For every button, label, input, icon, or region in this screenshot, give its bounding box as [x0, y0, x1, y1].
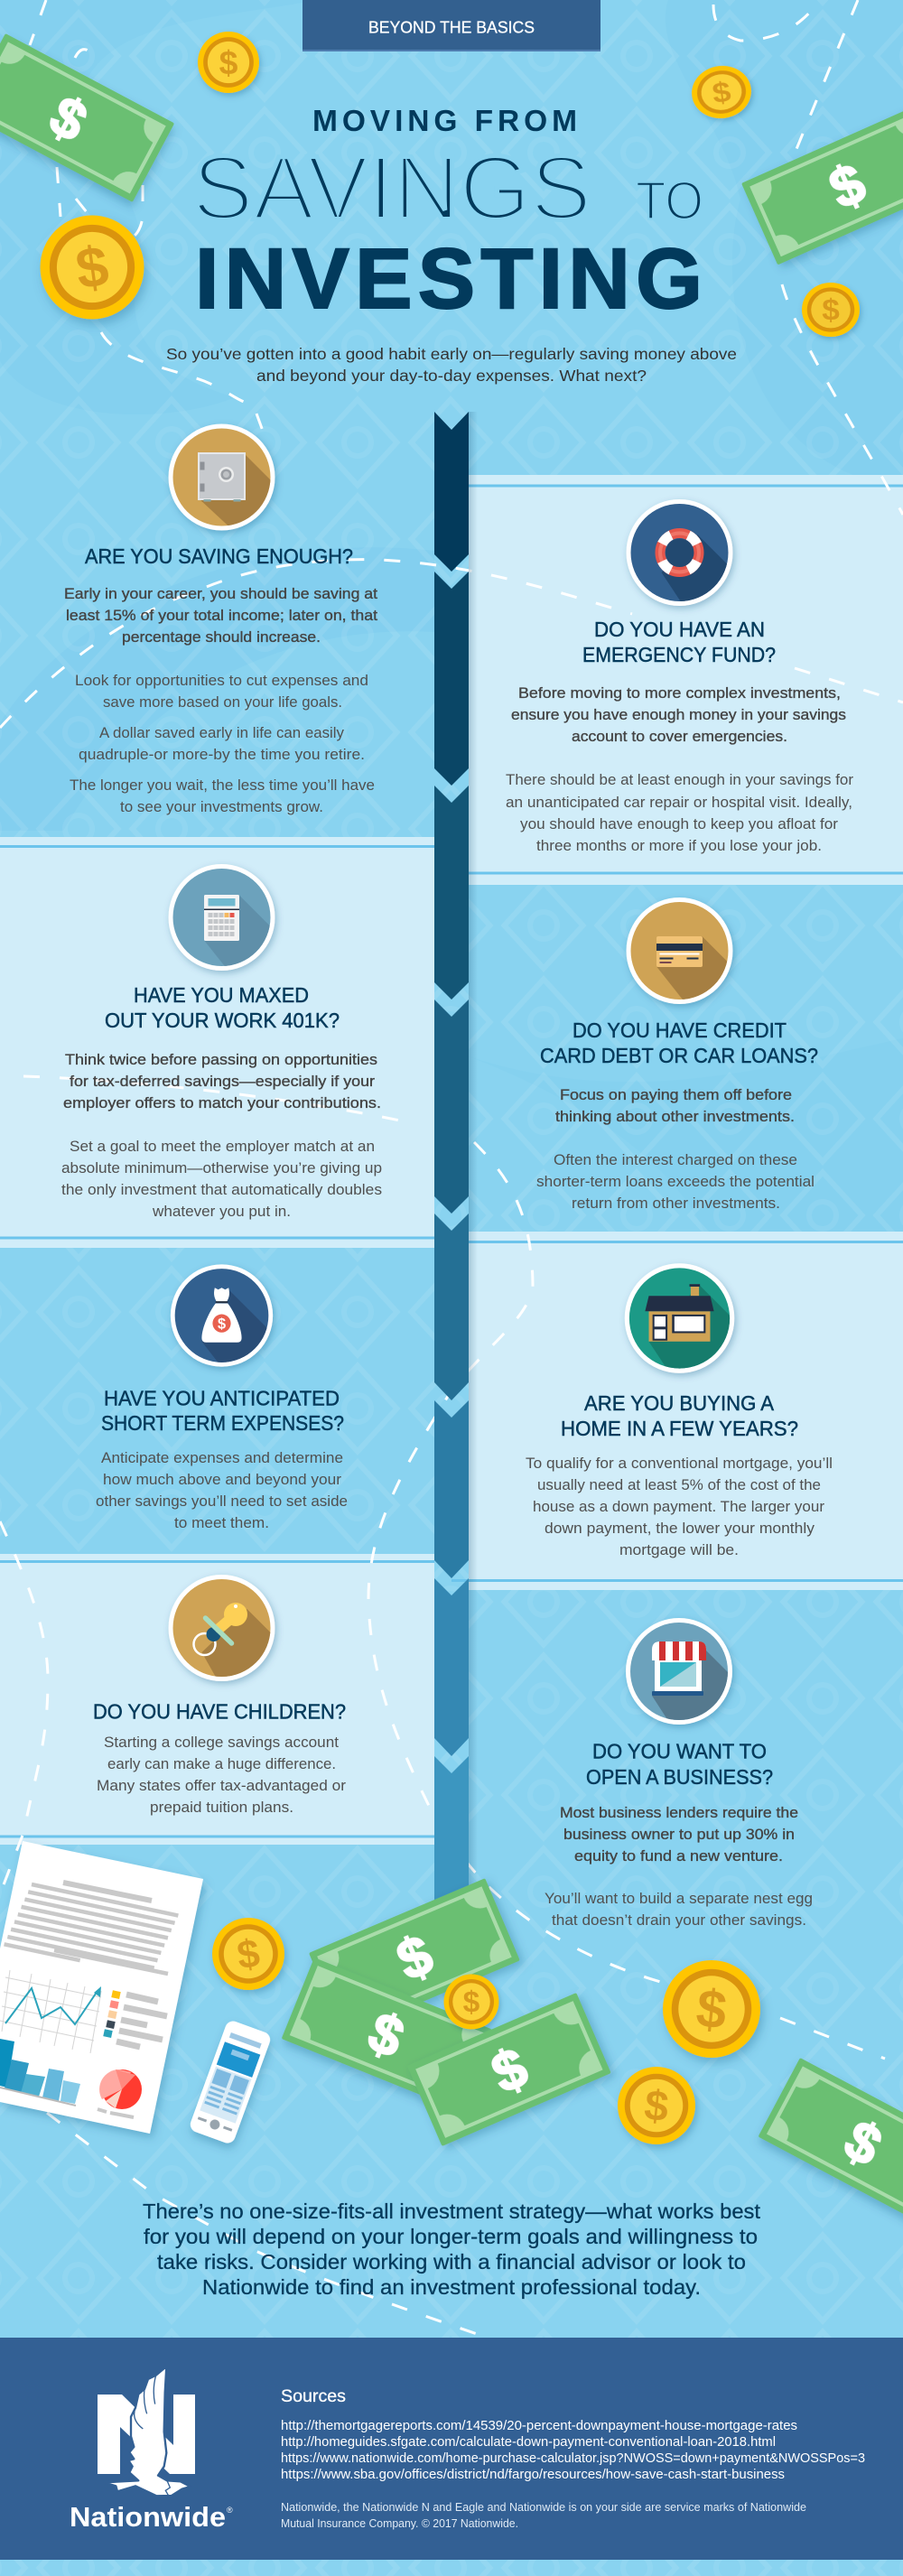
lead text [63, 1051, 381, 1111]
body text: Often the interest charged on these [554, 1152, 797, 1168]
lead text [511, 684, 846, 745]
lead text: percentage should increase. [122, 628, 321, 646]
bill: stack front: $ [483, 2036, 536, 2106]
body text [61, 1139, 382, 1220]
icon: money bag [170, 1264, 277, 1372]
banner [303, 0, 600, 51]
heading: DO YOU HAVE CREDIT [573, 1018, 787, 1042]
body text: Many states offer tax-advantaged or [97, 1778, 347, 1794]
bill: bottom right: $ [834, 2109, 891, 2179]
coin: top right small: $ [711, 76, 733, 110]
body text [545, 1891, 813, 1929]
body text: other savings you’ll need to set aside [96, 1493, 348, 1510]
title: INVESTING [195, 231, 703, 327]
heading [105, 983, 340, 1032]
coin: top right small [688, 62, 755, 122]
smartphone [188, 2019, 273, 2145]
coin: bottom right large: $ [694, 1977, 730, 2041]
heading: DO YOU HAVE AN [594, 618, 765, 641]
heading [101, 1387, 344, 1435]
banner: BEYOND THE BASICS [368, 18, 535, 36]
bill: stack front [407, 1993, 611, 2146]
body text: save more based on your life goals. [103, 694, 342, 711]
coin: top left small: $ [219, 43, 238, 81]
panel: 401k background [0, 837, 434, 1248]
central arrow ribbon [434, 412, 478, 1905]
body text: down payment, the lower your monthly [545, 1520, 815, 1537]
icon: storefront [625, 1618, 737, 1730]
document with charts [0, 1841, 203, 2134]
body text [97, 1734, 347, 1816]
body text [536, 1152, 815, 1212]
coin: bottom left [212, 1918, 284, 1990]
body text: quadruple-or more-by the time you retire. [79, 747, 365, 763]
panel: credit card debt [536, 897, 818, 1212]
body text: The longer you wait, the less time you’ll have [70, 777, 375, 794]
body text: Starting a college savings account [104, 1734, 339, 1751]
lead text: account to cover emergencies. [572, 728, 787, 745]
icon: pacifier [166, 1574, 280, 1688]
source links [281, 2418, 865, 2482]
body text: absolute minimum—otherwise you’re giving up [61, 1160, 382, 1176]
logo: Nationwide: Nationwide [70, 2501, 226, 2533]
coin: left big: $ [72, 235, 112, 302]
coin: left big [40, 215, 144, 320]
title: SAVINGS [192, 137, 591, 238]
coin: right small: $ [822, 293, 840, 327]
coin: bottom right medium: $ [642, 2081, 671, 2132]
bill: stack middle [282, 1959, 491, 2104]
body text: Anticipate expenses and determine [101, 1450, 343, 1466]
heading [582, 618, 776, 666]
heading [586, 1739, 773, 1789]
heading [561, 1391, 798, 1440]
source links: http://themortgagereports.com/14539/20-percent-downpayment-house-mortgage-rates [281, 2418, 797, 2433]
body text: an unanticipated car repair or hospital visit. Ideally, [506, 795, 852, 811]
lead text: Think twice before passing on opportunities [65, 1051, 377, 1068]
source links: http://homeguides.sfgate.com/calculate-down-payment-conventional-loan-2018.html [281, 2434, 776, 2450]
heading: ARE YOU SAVING ENOUGH? [85, 544, 353, 568]
body text: A dollar saved early in life can easily [99, 725, 345, 741]
source links: https://www.nationwide.com/home-purchase-calculator.jsp?NWOSS=down+payment&NWOSSPos=3 [281, 2450, 865, 2466]
body text [526, 1455, 833, 1558]
body text: the only investment that automatically doubles [61, 1182, 382, 1198]
lead text: Focus on paying them off before [560, 1086, 792, 1103]
bill: top left: $ [40, 85, 97, 154]
bill: top right [741, 111, 903, 269]
icon: money bag: $ [218, 1316, 226, 1332]
body text: You’ll want to build a separate nest egg [545, 1891, 813, 1907]
lead text [555, 1086, 795, 1125]
lead text: employer offers to match your contributions. [63, 1094, 381, 1111]
panel: children [93, 1575, 347, 1816]
heading: HOME IN A FEW YEARS? [561, 1417, 798, 1440]
lead text: business owner to put up 30% in [563, 1826, 795, 1843]
body text: There should be at least enough in your savings for [506, 772, 854, 788]
body text: house as a down payment. The larger your [533, 1499, 825, 1515]
coin: bottom left: $ [235, 1931, 263, 1978]
closing text: for you will depend on your longer-term goals and willingness to [144, 2225, 758, 2248]
body text: shorter-term loans exceeds the potential [536, 1174, 815, 1190]
sources heading: Sources [281, 2386, 346, 2406]
panel: maxed out 401k [61, 864, 382, 1220]
panel: are you saving enough [64, 424, 377, 815]
title: TO [636, 172, 703, 231]
intro text [166, 345, 737, 385]
coin: right small [802, 283, 860, 337]
lead text: least 15% of your total income; later on, that [66, 607, 377, 624]
heading: OPEN A BUSINESS? [586, 1765, 773, 1789]
panel: emergency fund background [469, 475, 903, 885]
legal text: Mutual Insurance Company. © 2017 Nationwide. [281, 2516, 518, 2530]
title [192, 105, 703, 327]
lead text: Before moving to more complex investments, [518, 684, 841, 702]
heading: HAVE YOU ANTICIPATED [104, 1387, 340, 1410]
icon: credit card [625, 897, 737, 1009]
closing text: There’s no one-size-fits-all investment strategy—what works best [143, 2199, 761, 2223]
closing text: Nationwide to find an investment professional today. [202, 2275, 701, 2299]
heading: ARE YOU BUYING A [584, 1391, 775, 1415]
icon: calculator [166, 863, 280, 977]
line chart [0, 1970, 101, 2053]
body text: mortgage will be. [619, 1542, 739, 1558]
heading: CARD DEBT OR CAR LOANS? [540, 1044, 818, 1067]
body text: To qualify for a conventional mortgage, you’ll [526, 1455, 833, 1472]
logo: Nationwide: ® [227, 2506, 233, 2515]
logo: Nationwide [70, 2367, 233, 2533]
pie chart [98, 2069, 142, 2117]
coin: bottom right large [663, 1960, 760, 2058]
bill: bottom right [758, 2058, 903, 2223]
icon: safe [168, 424, 280, 536]
body text: prepaid tuition plans. [150, 1799, 293, 1816]
intro text: and beyond your day-to-day expenses. What next? [256, 367, 647, 385]
document text lines [5, 1882, 178, 1978]
heading: DO YOU HAVE CHILDREN? [93, 1699, 346, 1723]
bill: top left [0, 33, 175, 208]
icon: life ring [625, 498, 739, 612]
body text: three months or more if you lose your job. [536, 838, 822, 854]
lead text [560, 1804, 798, 1865]
body text [70, 673, 375, 815]
intro text: So you’ve gotten into a good habit early on—regularly saving money above [166, 345, 737, 363]
coin: top left small [198, 32, 259, 93]
coin: on stack [444, 1974, 498, 2030]
bill: stack middle: $ [359, 2001, 412, 2070]
body text: to meet them. [174, 1515, 269, 1531]
body text: you should have enough to keep you afloat for [520, 816, 839, 832]
title: MOVING FROM [312, 105, 577, 138]
body text: early can make a huge difference. [107, 1756, 336, 1772]
legal text: Nationwide, the Nationwide N and Eagle and Nationwide is on your side are service marks of Nationwide [281, 2500, 806, 2514]
body text [506, 772, 854, 854]
panel: buying a home [526, 1263, 833, 1558]
lead text: thinking about other investments. [555, 1108, 795, 1125]
lead text: Most business lenders require the [560, 1804, 798, 1821]
body text: return from other investments. [572, 1195, 780, 1212]
body text: Set a goal to meet the employer match at an [70, 1139, 375, 1155]
heading [540, 1018, 818, 1067]
body text: Look for opportunities to cut expenses and [75, 673, 368, 689]
lead text [64, 585, 377, 646]
heading: EMERGENCY FUND? [582, 643, 776, 666]
body text: to see your investments grow. [120, 799, 323, 815]
icon: house [623, 1262, 740, 1380]
panel: emergency fund [506, 499, 854, 854]
lead text: for tax-deferred savings—especially if your [70, 1073, 375, 1090]
coin: bottom right medium [618, 2067, 695, 2144]
source links: https://www.sba.gov/offices/district/nd/fargo/resources/how-save-cash-start-business [281, 2467, 785, 2482]
panel: short term expenses [96, 1264, 348, 1531]
body text: that doesn’t drain your other savings. [552, 1912, 806, 1929]
body text: usually need at least 5% of the cost of the [537, 1477, 821, 1493]
coin: on stack: $ [463, 1986, 480, 2020]
heading: OUT YOUR WORK 401K? [105, 1009, 340, 1032]
bill: stack back [309, 1878, 526, 2005]
legal text [281, 2500, 806, 2530]
chart legend [103, 1990, 167, 2047]
body text [96, 1450, 348, 1531]
body text: whatever you put in. [152, 1204, 291, 1220]
bill: stack back: $ [388, 1923, 442, 1993]
heading: HAVE YOU MAXED [134, 983, 309, 1007]
panel: home background [452, 1232, 903, 1590]
panel: open a business [545, 1618, 813, 1929]
lead text: equity to fund a new venture. [574, 1847, 783, 1865]
bill: top right: $ [821, 152, 875, 221]
panel: children background [0, 1554, 434, 1845]
closing text [143, 2199, 761, 2299]
bar chart [0, 2039, 80, 2106]
heading: DO YOU WANT TO [592, 1739, 767, 1762]
footer [0, 2338, 903, 2560]
body text: how much above and beyond your [103, 1472, 342, 1488]
closing text: take risks. Consider working with a financial advisor or look to [157, 2250, 746, 2274]
lead text: ensure you have enough money in your savings [511, 706, 846, 723]
heading: SHORT TERM EXPENSES? [101, 1411, 344, 1435]
lead text: Early in your career, you should be saving at [64, 585, 377, 602]
